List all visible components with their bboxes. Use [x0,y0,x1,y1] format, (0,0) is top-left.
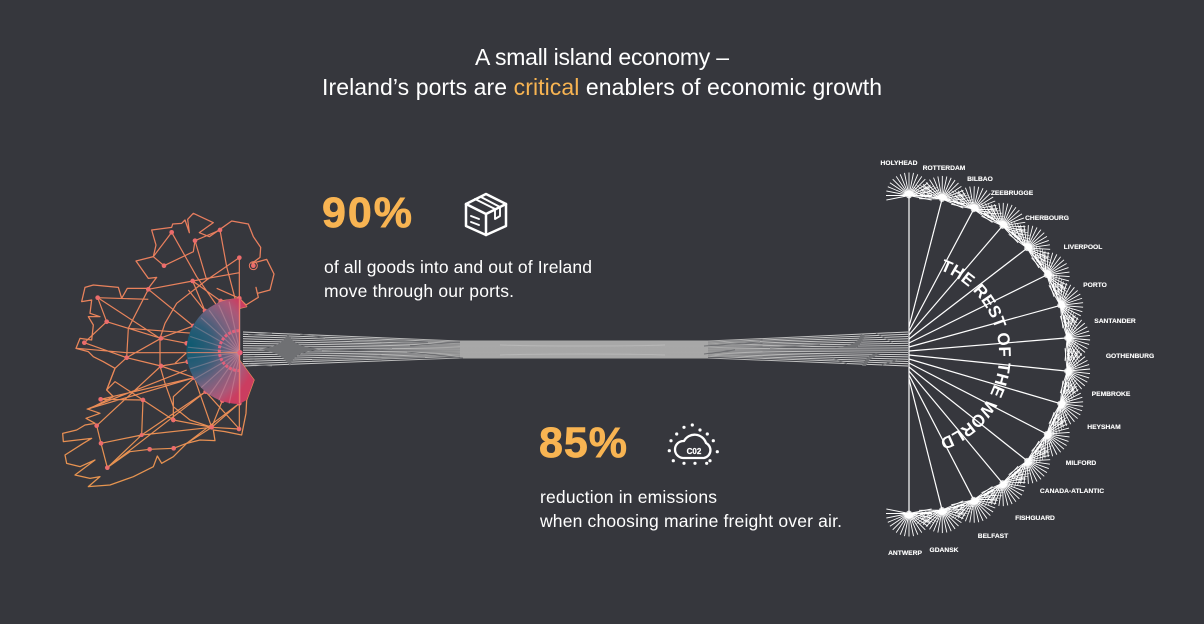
map of Ireland with port network [63,213,274,487]
bundle lines [243,332,908,366]
85% description: reduction in emissions [540,487,717,507]
90% figure: 90% [322,189,412,237]
icon: CO2 cloud [668,423,719,465]
port labels [881,160,1154,557]
title: Ireland’s ports are critical enablers of economic growth [322,74,882,100]
curved label: the rest of the world: THE REST OF THE WORLD [942,259,1011,448]
port labels: PORTO [1083,282,1107,289]
network nodes [82,228,257,470]
port labels: SANTANDER [1094,318,1136,325]
network links [77,230,239,468]
rest of the world port diagram [880,160,1154,557]
port labels: ZEEBRUGGE [991,190,1034,197]
bundle slivers [248,333,897,366]
stat: 90% of goods [322,189,592,301]
port labels: LIVERPOOL [1064,244,1102,251]
title: A small island economy – [475,44,729,70]
port labels: BILBAO [967,176,993,183]
90% description: move through our ports. [324,281,514,301]
icon: CO2 cloud: C02 [687,447,702,456]
port fans [886,172,1092,537]
port labels: HEYSHAM [1087,424,1121,431]
port labels: HOLYHEAD [881,160,918,167]
90% description [324,257,592,301]
left knot [256,334,322,366]
bundle shading [460,341,708,358]
port labels: ANTWERP [888,550,922,557]
85% figure: 85% [539,419,627,467]
85% description: when choosing marine freight over air. [539,511,842,531]
title [322,44,882,100]
port labels: GOTHENBURG [1106,353,1154,360]
port labels: BELFAST [978,533,1009,540]
port labels: ROTTERDAM [923,165,966,172]
90% description: of all goods into and out of Ireland [324,257,592,277]
shipping lane line bundle [243,332,908,366]
85% description [539,487,842,531]
icon: package box [466,194,506,235]
map outline [63,213,274,487]
right knots [834,334,880,366]
port labels: CHERBOURG [1025,215,1069,222]
port labels: MILFORD [1066,460,1096,467]
lighter centre strands [500,345,665,355]
port labels: FISHGUARD [1015,515,1055,522]
Dublin fan hub [186,298,254,405]
port labels: CANADA-ATLANTIC [1040,488,1104,495]
port labels: GDANSK [930,547,959,554]
stat: 85% emissions reduction [539,419,842,531]
port labels: PEMBROKE [1092,391,1131,398]
spokes [909,196,1068,514]
